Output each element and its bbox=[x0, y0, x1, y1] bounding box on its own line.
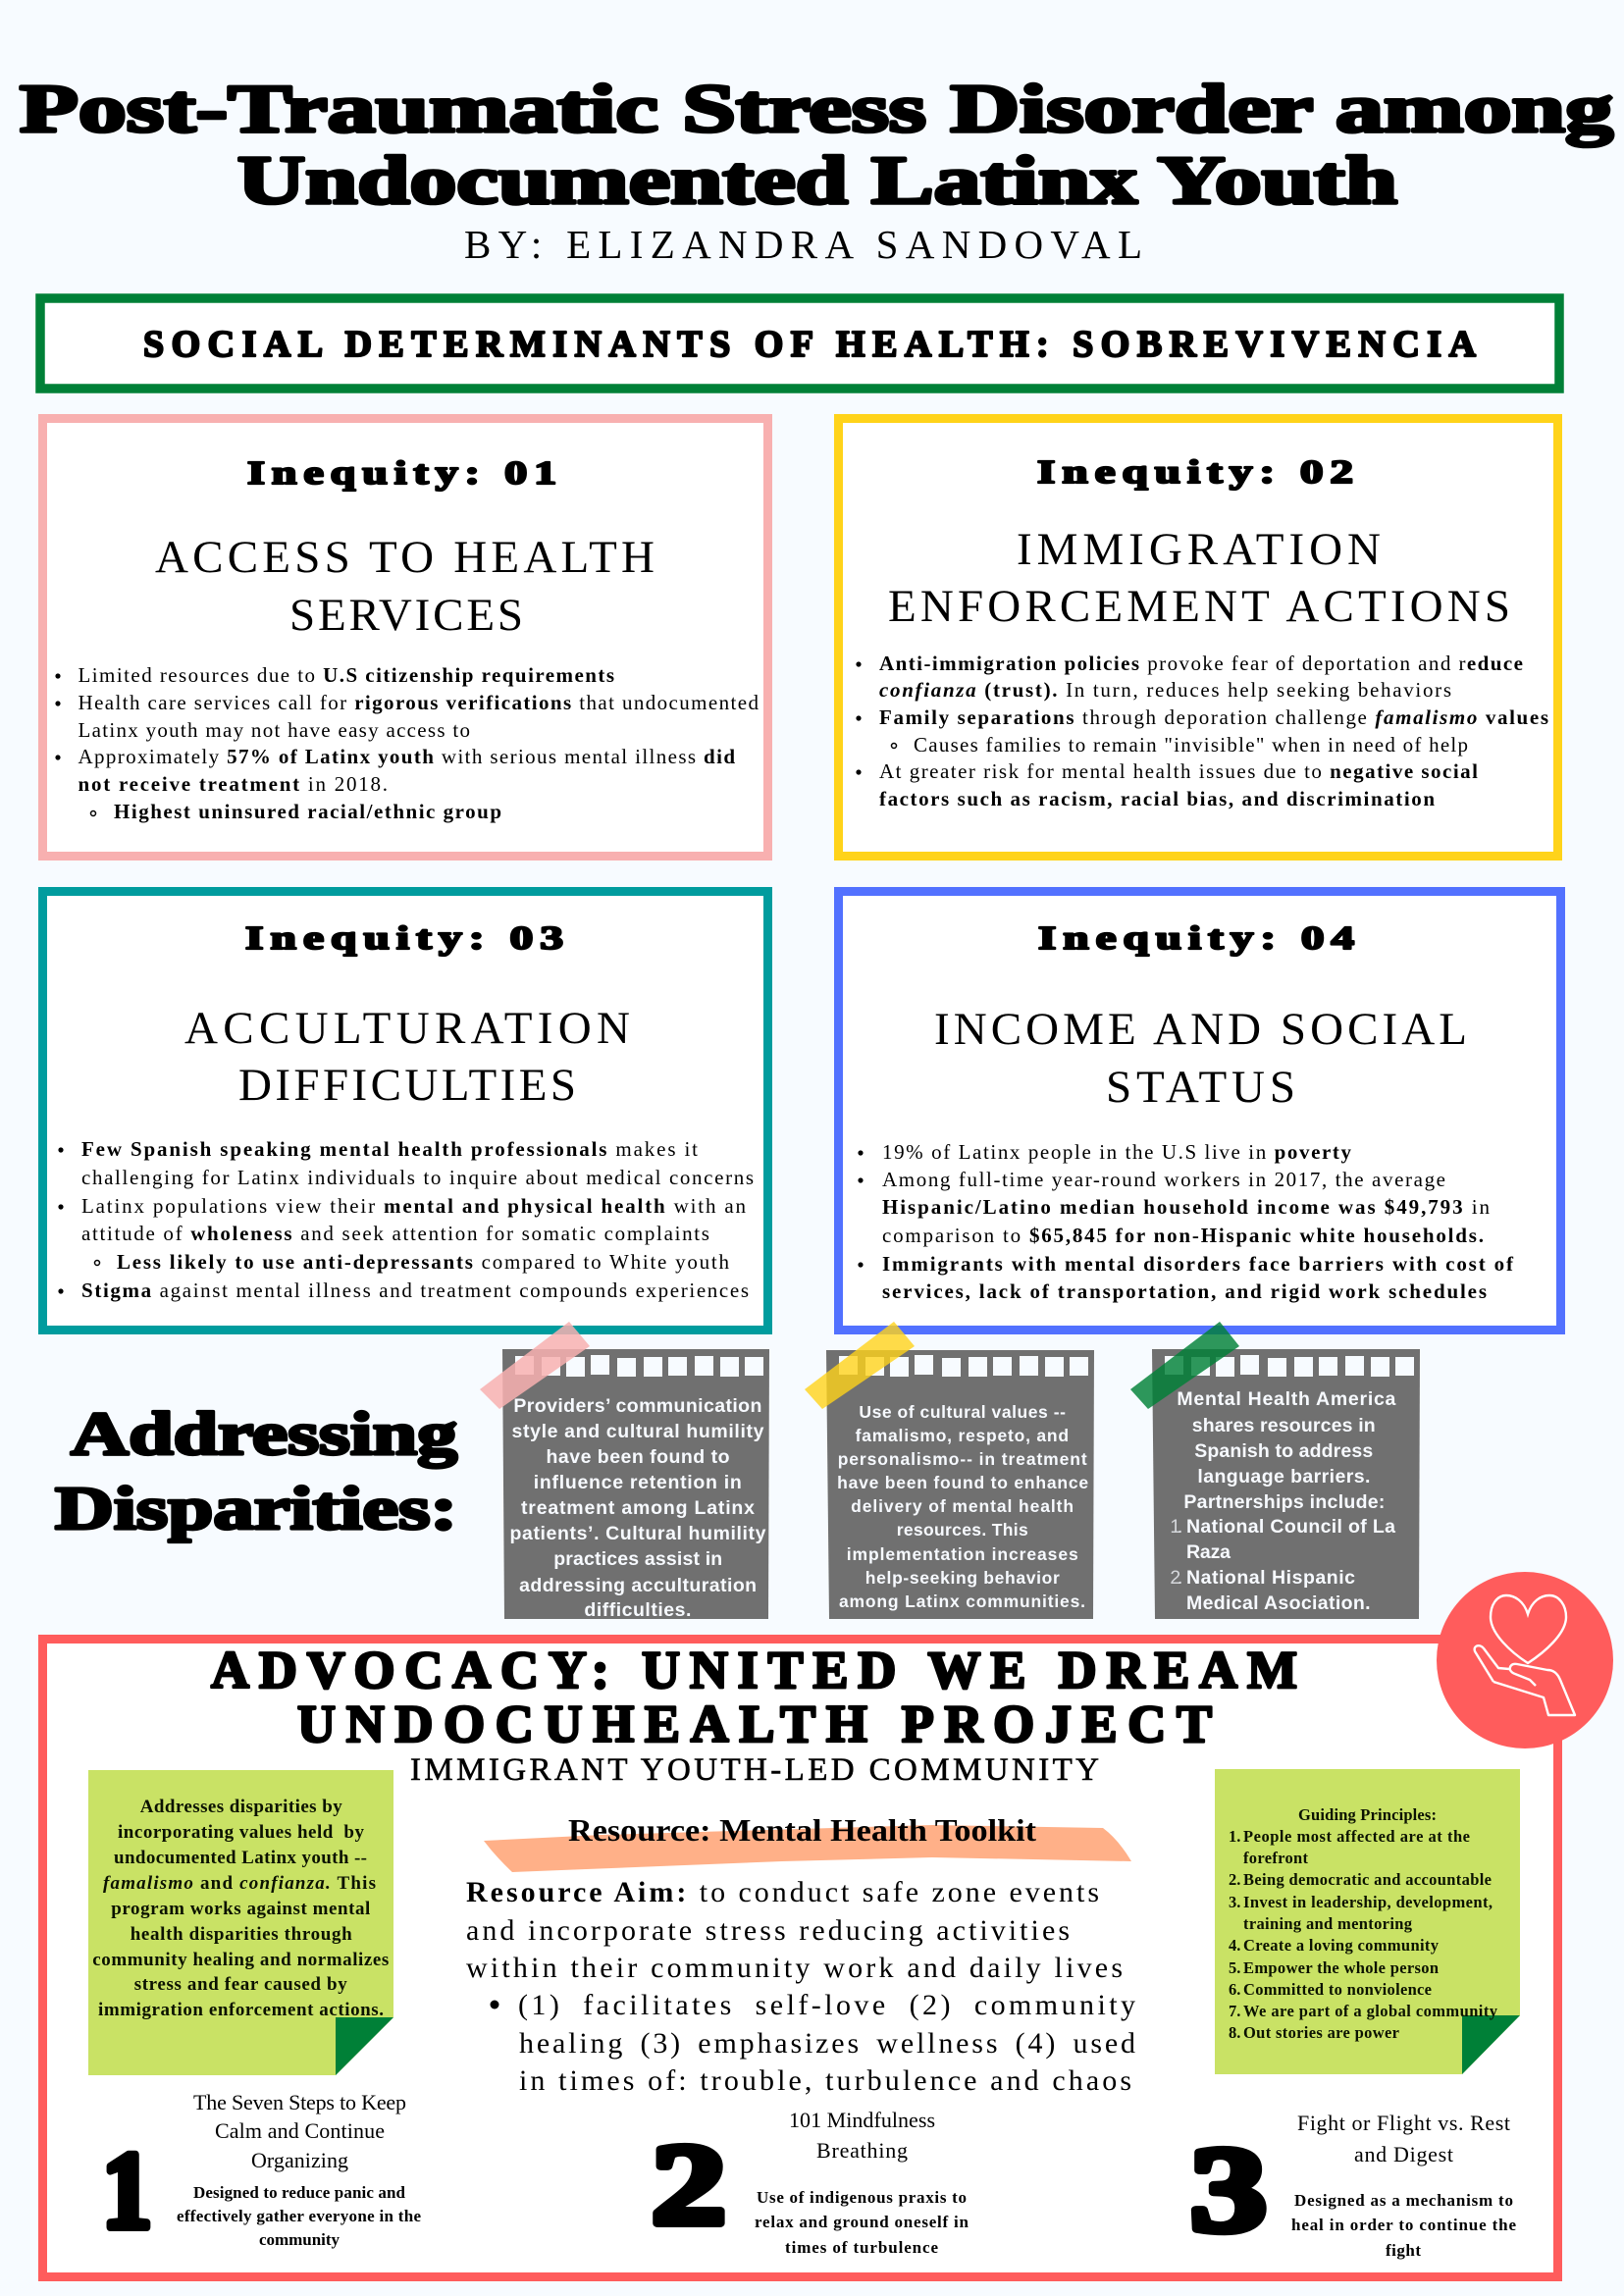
note: mental health america: 1. bbox=[1170, 1516, 1182, 1538]
panel: inequity 02: IMMIGRATION bbox=[1017, 524, 1381, 575]
brush stroke behind resource heading bbox=[484, 1825, 1131, 1872]
sticky note: guiding principles: Empower the whole person bbox=[1243, 1958, 1439, 1977]
note: mental health america: National Council of La bbox=[1186, 1516, 1395, 1538]
heading: advocacy: ADVOCACY: UNITED WE DREAM bbox=[211, 1641, 1297, 1699]
panel: inequity 04: INCOME AND SOCIAL bbox=[934, 1004, 1467, 1055]
sticky note: guiding principles: training and mentoring bbox=[1243, 1914, 1413, 1933]
panel: inequity 02 bbox=[838, 418, 1558, 856]
panel: inequity 03: attitude of wholeness and seek attention for somatic complaints bbox=[81, 1222, 709, 1245]
step 1: 1 bbox=[102, 2130, 152, 2252]
step 2: relax and ground oneself in bbox=[755, 2213, 969, 2231]
panel: inequity 01: Health care services call for rigorous verifications that undocumented bbox=[79, 691, 759, 714]
step 1: Organizing bbox=[251, 2148, 348, 2172]
panel: inequity 02: Anti-immigration policies provoke fear of deportation and reduce bbox=[879, 652, 1523, 675]
panel: inequity 03 bbox=[43, 891, 767, 1331]
resource heading: Resource: Mental Health Toolkit bbox=[568, 1812, 1036, 1848]
panel: inequity 03: Few Spanish speaking mental health professionals makes it bbox=[81, 1137, 698, 1161]
note: cultural values: famalismo, respeto, and bbox=[856, 1426, 1069, 1445]
note: providers communication: style and cultural humility bbox=[512, 1421, 764, 1442]
note: mental health america: Medical Asociation. bbox=[1186, 1592, 1370, 1614]
step 2: 101 Mindfulness bbox=[789, 2108, 935, 2132]
sticky note: guiding principles: forefront bbox=[1243, 1849, 1309, 1867]
sticky note: program description: famalismo and confianza. This bbox=[103, 1873, 376, 1894]
note: mental health america: shares resources in bbox=[1192, 1415, 1376, 1436]
panel: inequity 04: STATUS bbox=[1106, 1062, 1295, 1113]
step 2: times of turbulence bbox=[785, 2238, 938, 2257]
panel: inequity 02: ENFORCEMENT ACTIONS bbox=[888, 581, 1510, 632]
step 2: 2 bbox=[652, 2120, 726, 2249]
panel: inequity 04: services, lack of transportation, and rigid work schedules bbox=[882, 1279, 1487, 1303]
note: providers communication: treatment among Latinx bbox=[521, 1497, 755, 1519]
resource aim text: healing (3) emphasizes wellness (4) used bbox=[519, 2027, 1135, 2060]
panel: inequity 01: ACCESS TO HEALTH bbox=[155, 532, 655, 583]
heading: advocacy bbox=[211, 1641, 1297, 1753]
sticky note: program description: program works against mental bbox=[111, 1899, 370, 1919]
sticky note: program description: immigration enforcement actions. bbox=[98, 2000, 384, 2020]
panel: inequity 01: Highest uninsured racial/ethnic group bbox=[114, 800, 501, 823]
note: cultural values: resources. This bbox=[897, 1520, 1028, 1539]
sticky note: guiding principles: 3. bbox=[1229, 1893, 1240, 1911]
sticky note: guiding principles: 6. bbox=[1229, 1980, 1240, 1999]
heading: addressing disparities bbox=[55, 1401, 457, 1542]
panel: inequity 03: challenging for Latinx individuals to inquire about medical concerns bbox=[81, 1166, 754, 1189]
panel: inequity 03: ACCULTURATION bbox=[184, 1003, 630, 1054]
note: cultural values: personalismo-- in treatment bbox=[838, 1449, 1087, 1469]
note: providers communication: difficulties. bbox=[584, 1599, 691, 1621]
note: providers communication: influence retention in bbox=[534, 1472, 742, 1493]
resource aim text: and incorporate stress reducing activities bbox=[466, 1914, 1070, 1947]
note: providers communication bbox=[502, 1349, 769, 1621]
note: providers communication: addressing acculturation bbox=[519, 1575, 757, 1596]
sticky note: guiding principles: Being democratic and accountable bbox=[1243, 1870, 1492, 1889]
panel: inequity 03: Latinx populations view their mental and physical health with an bbox=[81, 1194, 747, 1218]
panel: inequity 04: Among full-time year-round workers in 2017, the average bbox=[882, 1168, 1445, 1191]
panel: inequity 01: Latinx youth may not have easy access to bbox=[79, 718, 470, 742]
panel: inequity 04: Inequity: 04 bbox=[1038, 920, 1361, 957]
heading: addressing disparities: Disparities: bbox=[55, 1476, 457, 1542]
note: providers communication: patients’. Cultural humility bbox=[510, 1523, 766, 1544]
note: cultural values: Use of cultural values -- bbox=[859, 1402, 1066, 1422]
panel: inequity 01: SERVICES bbox=[289, 590, 523, 641]
note: cultural values: help-seeking behavior bbox=[865, 1568, 1060, 1588]
title bbox=[20, 72, 1613, 219]
sticky note: guiding principles: Committed to nonviolence bbox=[1243, 1980, 1432, 1999]
resource aim text bbox=[466, 1876, 1135, 2097]
step 3: 3 bbox=[1190, 2122, 1267, 2257]
panel: inequity 02: confianza (trust). In turn, reduces help seeking behaviors bbox=[879, 678, 1451, 702]
step 3: Fight or Flight vs. Rest bbox=[1297, 2111, 1510, 2135]
panel: inequity 03: Less likely to use anti-depressants compared to White youth bbox=[117, 1250, 730, 1274]
step 1 bbox=[102, 2090, 421, 2252]
title: Post-Traumatic Stress Disorder among bbox=[20, 72, 1613, 147]
panel: inequity 03: Inequity: 03 bbox=[245, 920, 570, 957]
note: mental health america: Mental Health America bbox=[1177, 1388, 1396, 1410]
sticky note: guiding principles: Create a loving community bbox=[1243, 1936, 1440, 1955]
sticky note: program description: stress and fear caused by bbox=[134, 1974, 347, 1995]
subheading: immigrant youth-led community: IMMIGRANT YOUTH-LED COMMUNITY bbox=[410, 1752, 1099, 1788]
sticky note: program description: Addresses disparities by bbox=[140, 1797, 342, 1817]
panel: inequity 04 bbox=[838, 891, 1560, 1331]
sticky note: guiding principles: 1. bbox=[1229, 1827, 1240, 1846]
panel: inequity 01: not receive treatment in 2018. bbox=[79, 772, 388, 796]
icon: heart in hand bbox=[1437, 1572, 1613, 1748]
step 1: community bbox=[259, 2230, 340, 2249]
resource aim text: Resource Aim: to conduct safe zone events bbox=[466, 1876, 1099, 1908]
step 2 bbox=[652, 2108, 969, 2257]
note: mental health america: Spanish to address bbox=[1194, 1440, 1373, 1462]
step 1: effectively gather everyone in the bbox=[177, 2207, 421, 2225]
panel: inequity 03: Stigma against mental illness and treatment compounds experiences bbox=[81, 1278, 749, 1302]
step 3: and Digest bbox=[1354, 2142, 1453, 2166]
panel: inequity 03: DIFFICULTIES bbox=[238, 1060, 576, 1111]
note: mental health america: Partnerships include: bbox=[1183, 1491, 1385, 1513]
note: mental health america bbox=[1152, 1349, 1420, 1619]
heading: advocacy: UNDOCUHEALTH PROJECT bbox=[297, 1695, 1212, 1753]
note: mental health america: Raza bbox=[1186, 1541, 1231, 1563]
panel: inequity 02: Inequity: 02 bbox=[1037, 454, 1360, 491]
title: Undocumented Latinx Youth bbox=[237, 143, 1397, 219]
panel: inequity 04: comparison to $65,845 for non-Hispanic white households. bbox=[882, 1224, 1484, 1247]
note: mental health america: 2. bbox=[1170, 1567, 1182, 1589]
sticky note: guiding principles: Out stories are power bbox=[1243, 2023, 1399, 2042]
note: cultural values: implementation increases bbox=[847, 1544, 1078, 1564]
tape: pink bbox=[480, 1322, 590, 1409]
sticky note: program description: incorporating values held by bbox=[118, 1822, 365, 1843]
panel: advocacy bbox=[43, 1639, 1558, 2276]
step 1: Calm and Continue bbox=[215, 2118, 385, 2143]
note: cultural values: among Latinx communities. bbox=[839, 1592, 1085, 1611]
note: cultural values: have been found to enhance bbox=[837, 1473, 1088, 1492]
panel: inequity 02: Family separations through deporation challenge famalismo values bbox=[879, 705, 1548, 729]
sticky note: guiding principles: We are part of a global community bbox=[1243, 2002, 1498, 2020]
banner: social determinants of health: SOCIAL DETERMINANTS OF HEALTH: SOBREVIVENCIA bbox=[143, 324, 1477, 365]
note: mental health america: language barriers. bbox=[1197, 1466, 1370, 1487]
panel: inequity 01: Approximately 57% of Latinx youth with serious mental illness did bbox=[79, 745, 735, 768]
sticky note: program description: community healing and normalizes bbox=[92, 1950, 389, 1970]
resource aim text: in times of: trouble, turbulence and chaos bbox=[519, 2064, 1131, 2097]
sticky note: program description: undocumented Latinx youth -- bbox=[114, 1848, 367, 1868]
step 2: Breathing bbox=[816, 2138, 908, 2163]
heading: addressing disparities: Addressing bbox=[71, 1401, 457, 1468]
note: providers communication: have been found to bbox=[546, 1446, 730, 1468]
step 3: heal in order to continue the bbox=[1291, 2216, 1516, 2234]
sticky note: guiding principles bbox=[1215, 1769, 1520, 2074]
author byline: BY: ELIZANDRA SANDOVAL bbox=[464, 222, 1142, 267]
sticky note: guiding principles: People most affected are at the bbox=[1243, 1827, 1470, 1846]
sticky note: guiding principles: 5. bbox=[1229, 1958, 1240, 1977]
resource aim text: (1) facilitates self-love (2) community bbox=[518, 1989, 1135, 2021]
step 2: Use of indigenous praxis to bbox=[757, 2188, 967, 2207]
panel: inequity 04: Immigrants with mental disorders face barriers with cost of bbox=[882, 1252, 1514, 1276]
tape: yellow bbox=[805, 1322, 915, 1409]
sticky note: program description bbox=[88, 1770, 393, 2075]
step 3: fight bbox=[1386, 2241, 1421, 2260]
sticky note: guiding principles: Invest in leadership, development, bbox=[1243, 1893, 1493, 1911]
note: cultural values bbox=[826, 1350, 1094, 1619]
panel: inequity 02: factors such as racism, racial bias, and discrimination bbox=[879, 787, 1435, 810]
resource aim text: within their community work and daily lives bbox=[466, 1952, 1123, 1984]
panel: inequity 04: 19% of Latinx people in the U.S live in poverty bbox=[882, 1140, 1352, 1164]
sticky note: guiding principles: 8. bbox=[1229, 2023, 1240, 2042]
panel: inequity 02: At greater risk for mental health issues due to negative social bbox=[879, 759, 1478, 783]
banner: social determinants of health bbox=[40, 298, 1559, 389]
panel: inequity 01: Limited resources due to U.S citizenship requirements bbox=[79, 663, 614, 687]
panel: inequity 04: Hispanic/Latino median household income was $49,793 in bbox=[882, 1195, 1490, 1219]
sticky note: guiding principles: Guiding Principles: bbox=[1298, 1805, 1437, 1824]
note: providers communication: practices assist in bbox=[553, 1548, 722, 1570]
note: cultural values: delivery of mental health bbox=[851, 1496, 1074, 1516]
sticky note: program description: health disparities through bbox=[131, 1924, 352, 1945]
sticky note: guiding principles: 2. bbox=[1229, 1870, 1240, 1889]
note: mental health america: National Hispanic bbox=[1186, 1567, 1355, 1589]
panel: inequity 01 bbox=[43, 418, 767, 856]
step 3 bbox=[1190, 2111, 1516, 2260]
step 1: Designed to reduce panic and bbox=[193, 2183, 406, 2202]
note: providers communication: Providers’ communication bbox=[513, 1395, 761, 1417]
step 1: The Seven Steps to Keep bbox=[193, 2090, 406, 2114]
step 3: Designed as a mechanism to bbox=[1294, 2191, 1513, 2210]
sticky note: guiding principles: 7. bbox=[1229, 2002, 1240, 2020]
tape: green bbox=[1130, 1322, 1239, 1409]
sticky note: guiding principles: 4. bbox=[1229, 1936, 1240, 1955]
panel: inequity 02: Causes families to remain "invisible" when in need of help bbox=[914, 733, 1468, 757]
panel: inequity 01: Inequity: 01 bbox=[247, 455, 563, 492]
